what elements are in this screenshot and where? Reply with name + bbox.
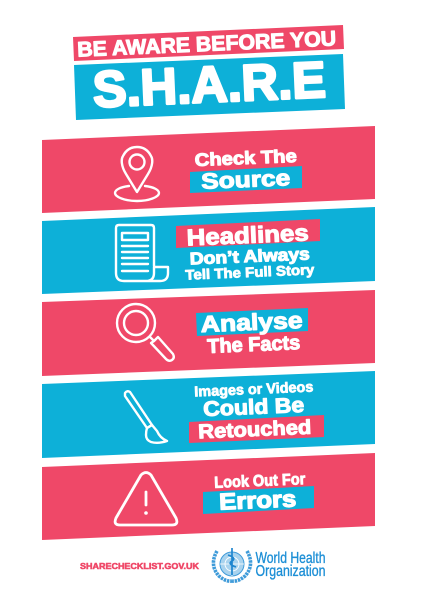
- label: headlines: Headlines: [186, 219, 309, 251]
- text: the facts: The Facts: [207, 332, 301, 358]
- panel: headlines: [42, 207, 375, 294]
- icon: warning triangle: [115, 472, 177, 525]
- logo text: World Health Organization: Organization: [256, 563, 326, 580]
- text: don't always: Don’t Always: [189, 245, 310, 269]
- label: retouched: Retouched: [198, 417, 312, 443]
- icon: newspaper scroll: [116, 225, 168, 281]
- text: check the: Check The: [194, 146, 297, 170]
- text: tell the full story: Tell The Full Story: [185, 261, 315, 283]
- heading: be aware before you: BE AWARE BEFORE YOU: [77, 27, 337, 62]
- label: source: Source: [201, 165, 291, 194]
- header: [73, 25, 345, 120]
- label: analyse: Analyse: [200, 307, 303, 337]
- heading: share: S.H.A.R.E: [92, 51, 327, 118]
- label: source: [190, 165, 302, 194]
- label: errors: [203, 485, 314, 515]
- panel: images or videos: [42, 371, 375, 458]
- label: errors: Errors: [219, 485, 297, 515]
- logo text: World Health Organization: [256, 550, 326, 580]
- icon: paint brush: [125, 391, 167, 443]
- icon: WHO emblem: [213, 548, 251, 581]
- panel: check the source: [42, 126, 375, 213]
- text: could be: Could Be: [203, 394, 305, 421]
- text: images or videos: Images or Videos: [194, 380, 314, 400]
- footer url: SHARECHECKLIST.GOV.UK: [80, 561, 200, 571]
- icon: magnifying glass: [117, 304, 174, 361]
- text: look out for: Look Out For: [214, 471, 306, 492]
- logo text: World Health Organization: World Health: [256, 550, 326, 567]
- panel: look out for errors: [42, 453, 375, 540]
- icon: location pin: [115, 147, 159, 201]
- panel: analyse the facts: [42, 290, 375, 376]
